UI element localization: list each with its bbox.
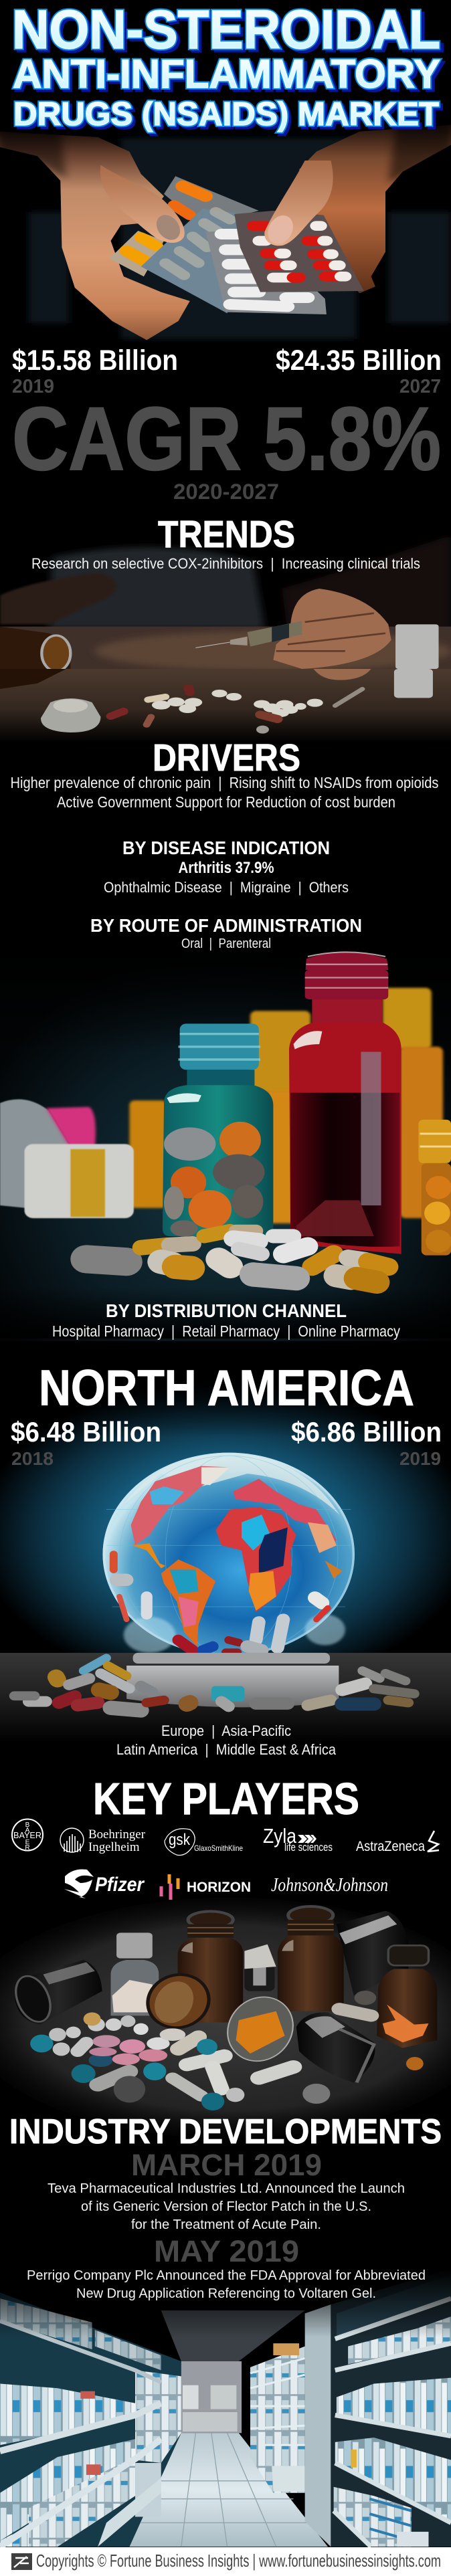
centre cabinet xyxy=(250,2343,305,2493)
continents xyxy=(131,1466,230,1545)
logo: Horizon xyxy=(161,1874,251,1900)
logo: AstraZeneca: AstraZeneca xyxy=(356,1839,425,1854)
footer bar xyxy=(0,2547,451,2576)
orange blister pack xyxy=(109,176,259,276)
icon: Fortune Business Insights logo xyxy=(11,2553,32,2570)
stat: 2019 market value: $15.58 Billion xyxy=(12,344,178,377)
globe base xyxy=(126,1653,339,1707)
red bottle cap top xyxy=(306,952,388,970)
thumbs xyxy=(100,161,333,246)
by route of administration: Oral | Parenteral xyxy=(181,936,271,951)
drivers text: Active Government Support for Reduction of cost burden xyxy=(57,793,395,811)
by distribution channel: BY DISTRIBUTION CHANNEL xyxy=(106,1300,347,1321)
bottles photo: teal and red bottles with capsules xyxy=(0,945,451,1341)
stat: 2027 market value: 2027 xyxy=(399,376,441,397)
march 2019 event: Teva Pharmaceutical Industries Ltd. Announced the Launch xyxy=(48,2181,405,2196)
scattered pills xyxy=(78,2009,371,2096)
stat: north america 2018: $6.48 Billion xyxy=(11,1416,161,1448)
title: DRUGS (NSAIDS) MARKET xyxy=(13,96,439,132)
small amber bottle right xyxy=(418,1120,451,1256)
right shelves xyxy=(334,2274,451,2547)
trends heading: TRENDS xyxy=(158,513,295,556)
capsule pile xyxy=(86,1231,388,1282)
black bottle left xyxy=(10,1960,102,2025)
globe photo: glass globe with pills xyxy=(0,1371,451,1743)
logo: Boehringer Ingelheim: Ingelheim xyxy=(88,1840,140,1854)
title: ANTI-INFLAMMATORY xyxy=(13,52,440,96)
stat: north america 2018 xyxy=(11,1416,161,1469)
red bottle xyxy=(289,970,401,1254)
stat: 2019 market value xyxy=(12,344,178,397)
stat: north america 2018: 2018 xyxy=(11,1448,54,1469)
pills in globe xyxy=(116,1564,126,1596)
clear blister pack xyxy=(141,209,242,313)
other regions xyxy=(116,1722,337,1758)
clear bottle with white pills xyxy=(110,1933,159,2015)
logo: Pfizer: Pfizer xyxy=(95,1874,145,1896)
stat: 2027 market value xyxy=(276,344,442,397)
by distribution channel xyxy=(52,1300,400,1340)
logo: Bayer: A xyxy=(25,1827,30,1834)
by disease indication: BY DISEASE INDICATION xyxy=(122,837,330,858)
black bottle right xyxy=(296,2012,375,2082)
logo: GSK: gsk xyxy=(169,1831,191,1849)
logo: Bayer: B xyxy=(25,1821,30,1829)
stat: north america 2019: 2019 xyxy=(399,1448,441,1469)
logo: GSK: GlaxoSmithKline xyxy=(194,1844,243,1853)
logo: Zyla Life Sciences: life sciences xyxy=(284,1841,333,1854)
glass jar with orange softgels xyxy=(220,1965,300,2066)
logo: Johnson & Johnson: Johnson&Johnson xyxy=(271,1874,388,1896)
trends text: Research on selective COX-2inhibitors | Increasing clinical trials xyxy=(31,555,420,572)
pharmacy photo: shelves and aisle xyxy=(0,2268,451,2547)
tipped amber jar xyxy=(141,1969,216,2033)
red capsule pack xyxy=(234,211,364,292)
march 2019 event: of its Generic Version of Flector Patch in the U.S. xyxy=(81,2199,371,2214)
teal bottle xyxy=(163,1023,273,1237)
logo: Zyla Life Sciences xyxy=(263,1824,333,1854)
by route of administration: BY ROUTE OF ADMINISTRATION xyxy=(90,915,362,936)
may 2019 event: New Drug Application Referencing to Voltaren Gel. xyxy=(76,2286,376,2301)
title: DRUGS (NSAIDS) MARKET xyxy=(13,96,439,132)
may 2019 event: Perrigo Company Plc Announced the FDA Approval for Abbreviated xyxy=(27,2268,426,2283)
white capsule pack xyxy=(205,229,327,314)
amber bottle with orange pills xyxy=(377,1945,437,2048)
logo: Bayer: R xyxy=(25,1844,30,1852)
logo: Zyla Life Sciences: Zyla xyxy=(263,1824,297,1848)
logo: Pfizer xyxy=(64,1869,145,1898)
stat: 2019 market value: 2019 xyxy=(12,376,54,397)
stat: north america 2019 xyxy=(291,1416,442,1469)
logo: Bayer xyxy=(12,1819,43,1852)
drivers text xyxy=(11,774,439,811)
rear amber bottles xyxy=(178,1906,408,2022)
globe sphere xyxy=(102,1453,355,1656)
CAGR figure: 2020-2027 xyxy=(173,480,279,504)
logo: AstraZeneca xyxy=(356,1831,439,1854)
march 2019 event xyxy=(48,2148,405,2232)
other regions: Europe | Asia-Pacific xyxy=(161,1722,291,1739)
bottles photo: amber bottles and scattered pills xyxy=(0,1898,451,2139)
by disease indication: Arthritis 37.9% xyxy=(178,859,274,877)
logo: Horizon: HORIZON xyxy=(187,1880,251,1895)
may 2019 event xyxy=(27,2234,426,2301)
may 2019 event: MAY 2019 xyxy=(154,2234,299,2268)
north america heading: NORTH AMERICA xyxy=(39,1359,414,1415)
spilled pills xyxy=(14,1658,414,1710)
door column xyxy=(305,2304,331,2547)
logo: Boehringer Ingelheim xyxy=(60,1827,146,1854)
march 2019 event: for the Treatment of Acute Pain. xyxy=(131,2217,321,2232)
title xyxy=(12,0,444,135)
logo: GSK xyxy=(165,1829,243,1855)
trends photo: syringe and pills on table xyxy=(0,535,451,742)
march 2019 event: MARCH 2019 xyxy=(131,2148,322,2182)
stat: north america 2019: $6.86 Billion xyxy=(291,1416,442,1448)
by route of administration xyxy=(90,915,362,951)
logo: Bayer: E xyxy=(25,1839,30,1846)
hero photo: hands holding blister packs xyxy=(0,120,451,340)
left shelves xyxy=(0,2298,181,2547)
logo: Bayer: BAYER xyxy=(13,1831,41,1840)
by distribution channel: Hospital Pharmacy | Retail Pharmacy | Online Pharmacy xyxy=(52,1322,400,1340)
other regions: Latin America | Middle East & Africa xyxy=(116,1741,337,1758)
by disease indication xyxy=(104,837,349,896)
by disease indication: Ophthalmic Disease | Migraine | Others xyxy=(104,879,349,896)
drivers heading: DRIVERS xyxy=(153,736,300,779)
key players heading: KEY PLAYERS xyxy=(93,1774,359,1824)
title: ANTI-INFLAMMATORY xyxy=(13,52,440,96)
title: ANTI-INFLAMMATORY xyxy=(15,54,444,99)
logo: Boehringer Ingelheim: Boehringer xyxy=(88,1827,146,1842)
title: DRUGS (NSAIDS) MARKET xyxy=(16,99,442,135)
